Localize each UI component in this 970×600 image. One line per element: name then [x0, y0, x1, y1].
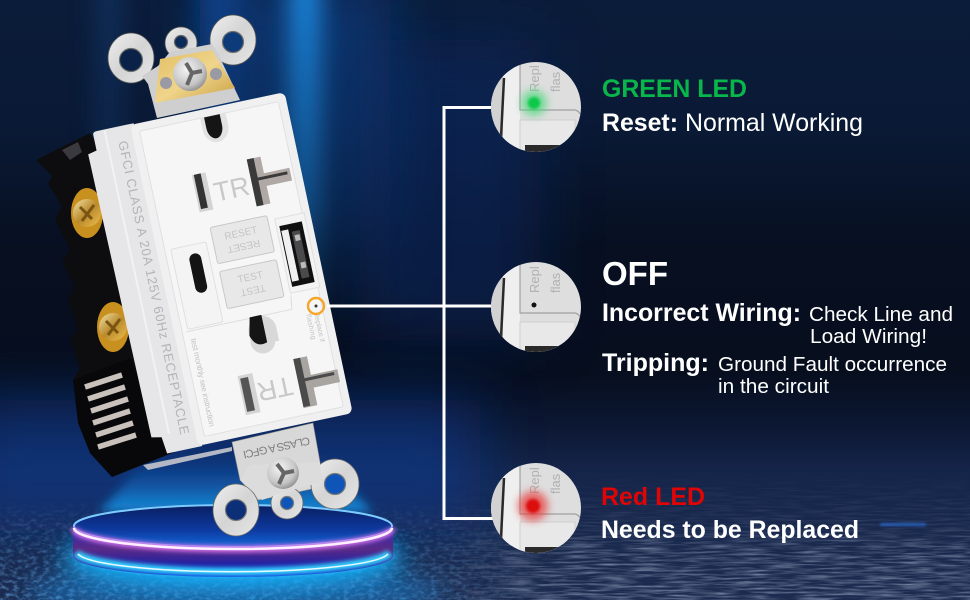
screw: upper brass — [71, 188, 103, 238]
bottom ground hole — [246, 313, 281, 356]
bottom TR mark: TR — [254, 370, 296, 407]
heading: off: OFF — [602, 255, 668, 292]
top TR mark: TR — [211, 171, 252, 208]
side note text: Replace if — [312, 312, 325, 343]
USB-C panel — [171, 242, 223, 329]
zoom circle: green LED: Repl — [527, 65, 542, 92]
zoom circle: green LED: flas — [548, 71, 563, 92]
heatsink — [73, 358, 172, 477]
bottom left slot — [238, 373, 261, 415]
zoom circle: red LED: Repl — [527, 467, 542, 494]
screw: lower brass — [97, 302, 129, 352]
zoom circle: off: Repl — [527, 266, 542, 293]
test button: TEST — [237, 270, 264, 286]
side note text 2: flashing — [304, 313, 317, 340]
test button — [219, 260, 284, 309]
top T slot — [247, 151, 296, 206]
zoom circle: off — [490, 260, 582, 356]
top left slot — [192, 172, 213, 212]
test button: TEST — [239, 282, 267, 298]
receptacle body — [84, 91, 353, 457]
side label: GFCI CLASS A 20A 125V 60Hz RECEPTACLE — [115, 139, 192, 436]
connector lines — [327, 106, 492, 520]
reset button: RESET — [224, 225, 258, 243]
front face — [130, 92, 353, 446]
USB-A port — [275, 213, 320, 293]
text: tripping: Ground Fault occurrence — [718, 353, 947, 376]
text: reset normal working: Reset: — [602, 109, 678, 137]
text: tripping: Tripping: — [602, 349, 709, 377]
bottom mounting strap — [213, 423, 359, 536]
lower edge text: test monthly see instruction — [189, 338, 216, 427]
zoom circle: green LED — [490, 60, 582, 154]
socket — [36, 15, 359, 536]
text: tripping — [602, 349, 947, 398]
zoom circle: off: flas — [548, 272, 563, 293]
platform — [63, 455, 403, 588]
lower panel line — [183, 295, 294, 332]
text: reset normal working: Normal Working — [685, 109, 863, 137]
text: incorrect wiring: Incorrect Wiring: — [602, 299, 801, 327]
zoom circle: red LED: flas — [548, 473, 563, 494]
reset button — [210, 216, 275, 264]
zoom circle: red LED — [490, 460, 582, 556]
text: incorrect wiring: Check Line and — [809, 303, 953, 326]
heading: red LED: Red LED — [601, 483, 705, 511]
black housing — [36, 133, 175, 477]
text: tripping: in the circuit — [718, 375, 829, 398]
bottom T slot — [293, 351, 344, 408]
housing highlights — [62, 142, 82, 160]
text: incorrect wiring — [602, 299, 953, 348]
top ground hole — [200, 113, 231, 145]
indicator ring — [308, 298, 324, 314]
side wall — [84, 123, 202, 457]
text: needs to be replaced: Needs to be Replaced — [601, 516, 859, 544]
reset button: RESET — [226, 237, 261, 254]
text: reset normal working — [602, 109, 863, 137]
top mounting strap — [108, 15, 256, 118]
text: incorrect wiring: Load Wiring! — [810, 325, 927, 348]
bottom mounting strap: CLASS A GFCI — [242, 434, 311, 460]
heading: green LED: GREEN LED — [602, 75, 747, 103]
metal strip under body — [143, 447, 232, 470]
